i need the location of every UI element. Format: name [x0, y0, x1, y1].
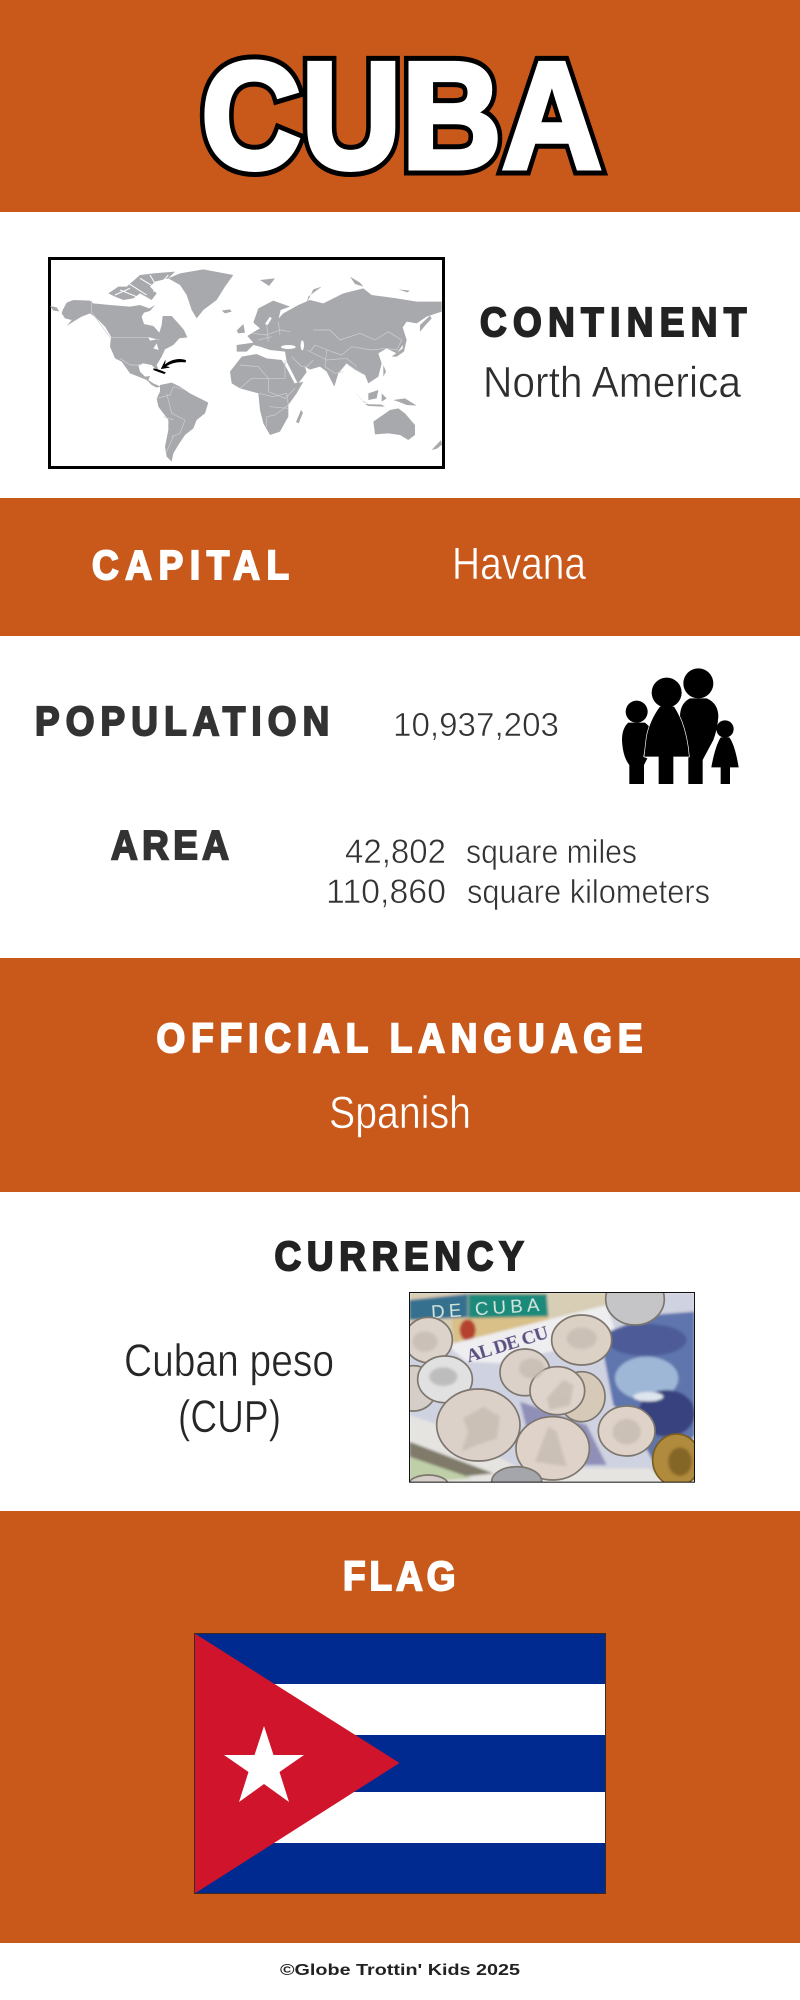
heading: CAPITAL: CAPITAL: [92, 543, 289, 588]
heading: POPULATION: POPULATION: [35, 699, 329, 744]
heading: AREA: AREA: [111, 823, 229, 868]
panel: flag: [0, 1511, 800, 1943]
world map with frame: [50, 258, 444, 468]
text: Spanish: Spanish: [329, 1087, 471, 1138]
text: area figures: 42,802: [345, 833, 446, 871]
flag of Cuba: [194, 1633, 606, 1894]
photo: coins and banknotes: [409, 1292, 695, 1483]
Cuba highlighted in black: [153, 368, 166, 374]
panel: population and area: [35, 668, 739, 911]
footer credit: ©Globe Trottin' Kids 2025: [280, 1962, 520, 1979]
heading: CURRENCY: CURRENCY: [274, 1234, 524, 1279]
banknote lettering: AL DE CU: [464, 1322, 551, 1367]
panel: continent: [50, 258, 747, 468]
text: Cuban peso (CUP): [124, 1335, 334, 1442]
arrow pointing to Cuba: [161, 359, 186, 369]
text: area figures: square miles: [466, 833, 637, 870]
heading: FLAG: FLAG: [343, 1554, 456, 1599]
title: CUBA: CUBA: [201, 31, 602, 201]
heading: CONTINENT: CONTINENT: [480, 300, 747, 345]
panel: capital: [0, 498, 800, 636]
panel: official language: [0, 958, 800, 1192]
text: Havana: Havana: [452, 538, 587, 589]
panel: currency: [124, 1234, 701, 1497]
text: area figures: [326, 833, 710, 911]
text: area figures: 110,860: [326, 873, 446, 911]
heading: OFFICIAL LANGUAGE: OFFICIAL LANGUAGE: [156, 1016, 643, 1061]
text: area figures: square kilometers: [467, 873, 710, 910]
header band: [0, 0, 800, 212]
title: CUBA: CUBA: [201, 31, 602, 201]
icon: family silhouette: [622, 668, 739, 784]
banknote lettering: DE CUBA: [430, 1294, 541, 1322]
text: Cuban peso (CUP): (CUP): [178, 1391, 281, 1442]
text: Cuban peso (CUP): Cuban peso: [124, 1335, 334, 1386]
text: population value: 10,937,203: [393, 706, 559, 743]
text: North America: North America: [483, 358, 741, 407]
banknote lettering: [432, 1298, 548, 1362]
